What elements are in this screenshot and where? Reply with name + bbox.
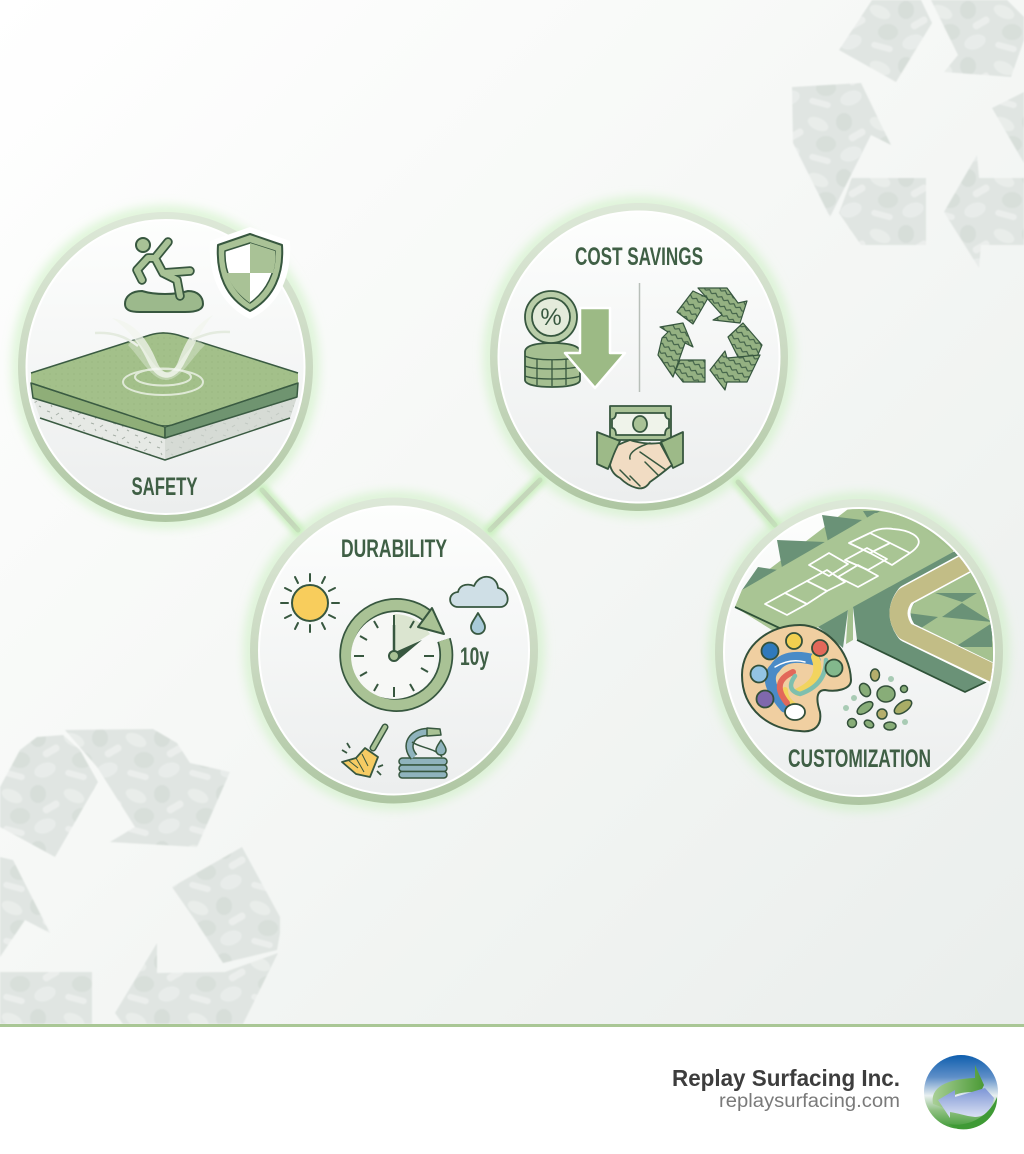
recycling watermark: top right (792, 0, 1024, 268)
icon: tyre tread recycling arrows (658, 288, 762, 390)
company name: Replay Surfacing Inc. (672, 1065, 900, 1091)
icon: rain cloud (450, 577, 508, 634)
panel: safety (18, 212, 313, 522)
footer panel (0, 1024, 1024, 1154)
inner play area (910, 571, 993, 672)
divider (638, 283, 640, 392)
website: replaysurfacing.com (719, 1091, 900, 1112)
icon: shield (210, 227, 290, 319)
illustration: playground surface (735, 500, 1000, 692)
heading: customization: CUSTOMIZATION (788, 745, 931, 773)
dark triangles (742, 511, 880, 590)
icon: paint palette (742, 625, 851, 731)
heading: cost savings: COST SAVINGS (575, 243, 703, 271)
panel: cost savings (490, 203, 788, 511)
heading: durability: DURABILITY (341, 535, 447, 563)
icon: sun (281, 574, 339, 632)
percent sign: % (540, 304, 562, 331)
panel: durability (250, 498, 538, 804)
panel: customization (715, 499, 1003, 805)
heading: safety: SAFETY (132, 473, 198, 501)
recycling watermark: bottom left (0, 729, 280, 1024)
icon: handshake with banknote (597, 406, 683, 488)
icon: garden hose (399, 728, 447, 778)
track (900, 562, 995, 675)
upper light field (735, 509, 954, 630)
icon: clock with arrow (346, 605, 446, 705)
icon: rubber crumbs (843, 669, 914, 730)
connectors between circles (262, 480, 775, 530)
icon: company logo (924, 1055, 998, 1129)
label: ten years: 10y (460, 643, 489, 671)
hopscotch (765, 528, 919, 615)
icon: broom (342, 727, 385, 777)
hopscotch band (735, 512, 953, 641)
icon: slipping person on mat (125, 238, 203, 312)
icon: layered safety surface (31, 315, 298, 460)
icon: coins with percent and down arrow (525, 291, 625, 388)
dark base (853, 552, 993, 691)
